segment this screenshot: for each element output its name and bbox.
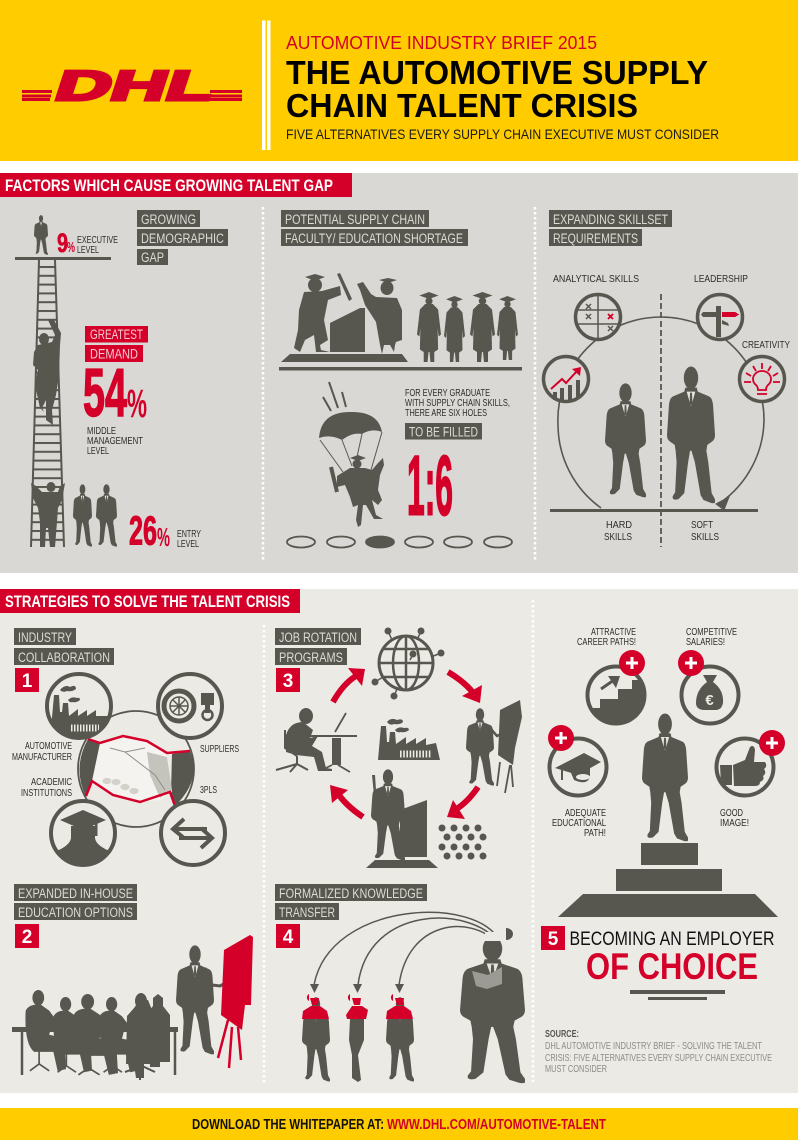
title: CHAIN TALENT CRISIS <box>286 87 638 124</box>
icon: money bag <box>678 650 738 724</box>
label: soft skills: SKILLS <box>691 531 719 543</box>
tag: growing demographic gap <box>137 210 228 265</box>
learner 2 <box>346 994 368 1082</box>
icon: graduation circle <box>51 801 115 870</box>
source note <box>545 1029 772 1075</box>
panel: factors causing talent gap <box>0 173 798 573</box>
badge: plus <box>678 650 704 676</box>
icon: factory circle <box>47 674 112 740</box>
tag: in-house education <box>14 884 137 920</box>
lecturer at podium <box>366 769 438 868</box>
callout: greatest demand: DEMAND <box>90 346 138 362</box>
falling graduate with parachute <box>319 382 384 527</box>
callout: greatest demand: GREATEST <box>90 327 143 342</box>
title <box>286 54 708 124</box>
column: faculty shortage: 1:6 <box>407 438 453 532</box>
title: THE AUTOMOTIVE SUPPLY <box>286 54 708 91</box>
handshake <box>78 711 194 827</box>
label: middle management: MIDDLE <box>87 425 116 437</box>
heading: strategies: STRATEGIES TO SOLVE THE TALENT CRISIS <box>5 593 290 611</box>
arrow: to presenter <box>448 672 482 703</box>
source note: SOURCE: <box>545 1029 579 1040</box>
label: suppliers: SUPPLIERS <box>200 743 239 755</box>
arrow: to desk <box>330 785 363 817</box>
central figure <box>642 713 689 841</box>
entry level figures <box>31 482 117 547</box>
six holes <box>287 536 512 548</box>
tag: knowledge transfer: TRANSFER <box>279 905 335 920</box>
callout: greatest demand <box>85 326 148 362</box>
number 2 <box>15 924 39 948</box>
label: hard skills: HARD <box>606 519 632 531</box>
source note: MUST CONSIDER <box>545 1064 607 1075</box>
tag: skillset <box>549 210 672 246</box>
tag: industry collaboration: COLLABORATION <box>18 650 110 665</box>
tag: growing demographic gap: GAP <box>141 250 164 265</box>
climbing manager <box>33 320 61 425</box>
label: attractive career paths: ATTRACTIVE <box>591 626 636 638</box>
icon: two-way arrows <box>161 801 225 865</box>
label: competitive salaries: SALARIES! <box>686 636 725 648</box>
badge: plus <box>548 725 574 751</box>
text: for every graduate: FOR EVERY GRADUATE <box>405 387 490 399</box>
label: hard skills <box>604 519 632 543</box>
icon: money bag: € <box>705 692 714 709</box>
label: automotive manufacturer: AUTOMOTIVE <box>25 740 72 752</box>
podium <box>558 843 778 917</box>
tag: faculty shortage: POTENTIAL SUPPLY CHAIN <box>285 212 425 227</box>
number 1: 1 <box>22 671 33 692</box>
label: automotive manufacturer <box>12 740 72 763</box>
heading: becoming an employer of choice: OF CHOICE <box>586 946 758 987</box>
number 1 <box>15 668 39 692</box>
icon: wheel and piston <box>158 674 222 738</box>
skill arc diagram <box>550 294 764 547</box>
label: hard skills: SKILLS <box>604 531 632 543</box>
figure: hard skills <box>605 383 647 497</box>
stat: 26% entry: 26 <box>129 508 157 554</box>
audience dots <box>438 824 486 860</box>
DHL logo <box>22 63 242 110</box>
label: attractive career paths <box>577 626 636 648</box>
icon: signpost <box>698 294 742 340</box>
number 4: 4 <box>283 927 294 948</box>
presenter <box>176 945 214 1054</box>
badge: plus <box>619 650 645 676</box>
label: good image: GOOD <box>720 807 743 819</box>
label: adequate educational path <box>552 807 606 839</box>
heading: factors: FACTORS WHICH CAUSE GROWING TALENT GAP <box>5 177 333 195</box>
tag: industry collaboration: INDUSTRY <box>18 630 72 645</box>
knowledge arrows <box>310 912 500 993</box>
tag: job rotation: JOB ROTATION <box>279 630 357 645</box>
learner 1 <box>302 994 330 1082</box>
stat: 54%: 54 <box>83 355 127 431</box>
DHL logo: DHL <box>49 63 221 110</box>
tag: growing demographic gap: DEMOGRAPHIC <box>141 231 224 246</box>
number 2: 2 <box>22 927 32 948</box>
label: soft skills <box>691 519 719 543</box>
label: good image: IMAGE! <box>720 817 749 829</box>
text: for every graduate <box>405 387 510 419</box>
strategy 5: employer of choice <box>541 626 785 1075</box>
label: attractive career paths: CAREER PATHS! <box>577 636 636 648</box>
badge: plus <box>759 730 785 756</box>
number 3: 3 <box>283 671 293 692</box>
number 5 <box>541 926 565 950</box>
factory <box>378 719 440 760</box>
label: analytical skills: ANALYTICAL SKILLS <box>553 273 639 285</box>
label: good image <box>720 807 749 829</box>
header banner <box>0 0 798 161</box>
label: academic institutions <box>21 776 72 799</box>
label: competitive salaries <box>686 626 737 648</box>
strategy 3: job rotation <box>275 628 522 868</box>
strategy 1: industry collaboration <box>12 628 239 870</box>
heading: factors <box>0 173 352 197</box>
heading: becoming an employer of choice <box>570 929 774 987</box>
tag: growing demographic gap: GROWING <box>141 212 196 227</box>
footer banner <box>0 1108 798 1140</box>
number 5: 5 <box>548 929 559 950</box>
stat: 9% executive: LEVEL <box>77 244 99 256</box>
stat: 9% executive: % <box>67 239 75 256</box>
number 3 <box>276 668 300 692</box>
ladder <box>15 257 111 547</box>
panel: strategies <box>0 589 798 1093</box>
label: academic institutions: ACADEMIC <box>31 776 72 788</box>
tag: in-house education: EDUCATION OPTIONS <box>18 905 133 920</box>
learner 3 <box>386 994 414 1082</box>
tag: knowledge transfer: FORMALIZED KNOWLEDGE <box>279 886 423 901</box>
tag: faculty shortage <box>281 210 468 246</box>
divider bars <box>262 20 270 150</box>
pointer arm <box>205 968 237 986</box>
footer banner: DOWNLOAD THE WHITEPAPER AT: <box>192 1117 384 1133</box>
icon: growth chart <box>544 356 588 402</box>
trainer with flipchart <box>466 700 522 793</box>
label: adequate educational path: PATH! <box>584 827 606 839</box>
footer banner: WWW.DHL.COM/AUTOMOTIVE-TALENT <box>387 1117 606 1133</box>
label: middle management <box>87 425 143 457</box>
text: for every graduate: WITH SUPPLY CHAIN SKILLS, <box>405 397 510 409</box>
strategy 4: knowledge transfer <box>275 884 526 1083</box>
graduation ceremony <box>279 273 522 370</box>
mentor with book <box>460 928 526 1083</box>
stat: 26% entry: ENTRY <box>177 528 201 540</box>
globe network <box>372 628 444 700</box>
tag: job rotation <box>275 628 361 665</box>
strategy 2: in-house education <box>12 884 253 1080</box>
label: leadership: LEADERSHIP <box>694 273 748 285</box>
meeting attendees <box>12 990 178 1080</box>
stat: 9% executive <box>57 228 118 258</box>
desk worker <box>276 708 357 772</box>
subtitle: FIVE ALTERNATIVES EVERY SUPPLY CHAIN EXECUTIVE MUST CONSIDER <box>286 126 719 142</box>
tag: skillset: REQUIREMENTS <box>553 231 638 246</box>
label: middle management: LEVEL <box>87 445 109 457</box>
icon: career stairs <box>585 650 645 725</box>
arrow: to globe <box>333 668 365 702</box>
stat: 26% entry <box>129 508 201 554</box>
number 4 <box>276 924 300 948</box>
column: demographic gap <box>15 210 228 554</box>
label: automotive manufacturer: MANUFACTURER <box>12 751 72 763</box>
label: 3PLs: 3PLS <box>200 784 217 796</box>
arrow: to audience <box>447 787 478 819</box>
tag: to be filled: TO BE FILLED <box>409 424 478 440</box>
label: adequate educational path: EDUCATIONAL <box>552 817 606 829</box>
stat: 26% entry: % <box>157 522 170 552</box>
icon: graduation cap <box>548 725 606 796</box>
label: academic institutions: INSTITUTIONS <box>21 787 72 799</box>
tag: faculty shortage: FACULTY/ EDUCATION SHORTAGE <box>285 231 463 246</box>
label: adequate educational path: ADEQUATE <box>565 807 606 819</box>
tag: skillset: EXPANDING SKILLSET <box>553 212 668 227</box>
icon: decision matrix <box>576 294 620 340</box>
text: for every graduate: THERE ARE SIX HOLES <box>405 407 487 419</box>
label: soft skills: SOFT <box>691 519 713 531</box>
column: faculty shortage <box>279 210 522 548</box>
stat: 26% entry: LEVEL <box>177 538 199 550</box>
icon: light bulb <box>740 356 784 402</box>
stat: 9% executive: 9 <box>57 228 68 258</box>
kicker: AUTOMOTIVE INDUSTRY BRIEF 2015 <box>286 33 597 53</box>
tag: industry collaboration <box>14 628 114 665</box>
stat: 54%: % <box>127 382 147 426</box>
heading: strategies <box>0 589 300 613</box>
column: expanding skillset <box>544 210 790 547</box>
red flipchart <box>218 935 253 1068</box>
tag: knowledge transfer <box>275 884 427 920</box>
label: middle management: MANAGEMENT <box>87 435 143 447</box>
tag: in-house education: EXPANDED IN-HOUSE <box>18 886 133 901</box>
tag: job rotation: PROGRAMS <box>279 650 343 665</box>
icon: thumbs up <box>716 730 785 796</box>
stat: 9% executive: EXECUTIVE <box>77 234 118 246</box>
figure: soft skills <box>667 366 716 503</box>
label: competitive salaries: COMPETITIVE <box>686 626 737 638</box>
executive figure <box>34 215 48 255</box>
